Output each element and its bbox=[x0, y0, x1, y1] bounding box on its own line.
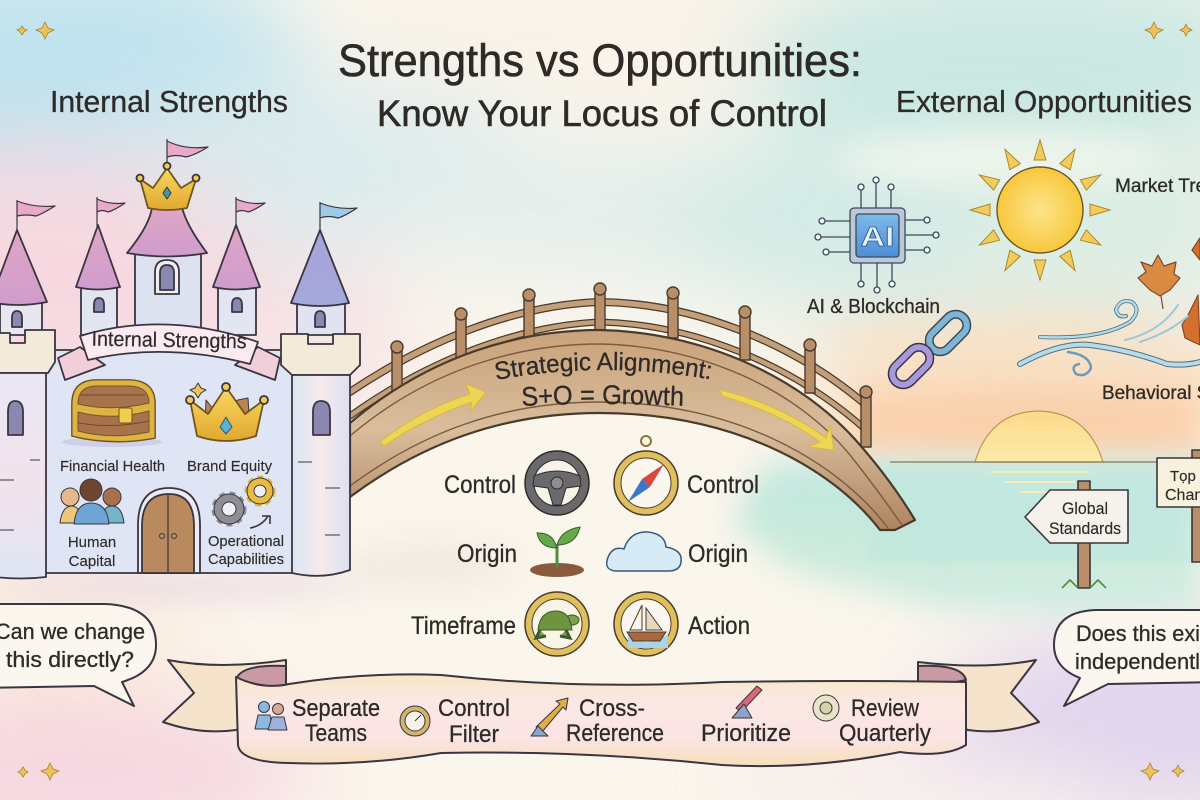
action labels: Filter bbox=[449, 721, 499, 748]
label: operational capabilities: Operational bbox=[208, 533, 284, 550]
flags bbox=[17, 139, 357, 232]
bridge label: S+O = Growth bbox=[522, 385, 683, 406]
ribbon label: Internal Strengths bbox=[91, 328, 247, 353]
action labels: Review bbox=[851, 695, 920, 722]
panel: castle bbox=[0, 139, 360, 578]
castle ribbon bbox=[58, 324, 280, 380]
panel: speech bubble right bbox=[1054, 610, 1200, 706]
panel: speech bubble left: this directly? bbox=[6, 647, 134, 672]
icon: AI chip: AI bbox=[860, 221, 894, 252]
icon: treasure chest bbox=[62, 380, 162, 447]
left tower bbox=[0, 230, 55, 578]
setting sun on horizon bbox=[890, 411, 1200, 492]
icon: autumn leaves bbox=[1138, 238, 1200, 345]
action labels: Prioritize bbox=[701, 720, 791, 747]
row 2: origin bbox=[457, 527, 748, 577]
bridge railing bbox=[350, 302, 866, 430]
label: human capital: Human bbox=[68, 534, 116, 551]
icon: gears bbox=[214, 478, 273, 528]
icon: human capital people bbox=[60, 479, 124, 524]
signpost: right clipped bbox=[1157, 450, 1200, 562]
row 3: timeframe and action bbox=[411, 592, 750, 656]
panel: bridge bbox=[350, 283, 915, 530]
bridge deck bbox=[350, 330, 915, 530]
icon: cross-reference arrow bbox=[531, 698, 568, 736]
action labels: Quarterly bbox=[839, 720, 931, 747]
signpost: global standards: Global bbox=[1062, 499, 1108, 518]
action labels bbox=[292, 695, 931, 748]
row 1: control bbox=[444, 436, 759, 515]
icon: control filter dial bbox=[400, 706, 430, 736]
title: Strengths vs Opportunities: bbox=[338, 35, 862, 86]
panel: speech bubble right: independentl bbox=[1075, 649, 1200, 674]
heading: external opportunities: External Opportunities bbox=[896, 84, 1192, 119]
action labels: Teams bbox=[305, 720, 367, 747]
icon: separate teams bbox=[255, 702, 287, 730]
center keep bbox=[127, 207, 207, 328]
side turrets bbox=[76, 225, 260, 335]
icon: AI chip bbox=[815, 177, 939, 293]
icon: chain link bbox=[888, 310, 971, 389]
label: human capital: Capital bbox=[69, 553, 115, 570]
signpost: global standards bbox=[1025, 481, 1128, 588]
signpost: right clipped: Tọp bbox=[1170, 468, 1196, 485]
icon: wind swirl bbox=[1020, 301, 1200, 375]
row 1: control: Control bbox=[687, 471, 759, 499]
bridge label: Strategic Alignment: bbox=[495, 352, 711, 380]
yellow arrows on deck bbox=[380, 384, 834, 450]
castle wall bbox=[40, 350, 295, 573]
icon: prioritize lever bbox=[732, 686, 762, 718]
icon: crown brand equity bbox=[186, 383, 268, 441]
icon: review quarterly dial bbox=[813, 695, 839, 721]
signpost: global standards: Standards bbox=[1049, 519, 1121, 538]
panel: speech bubble left bbox=[0, 604, 156, 706]
action labels: Control bbox=[438, 695, 510, 722]
title bbox=[338, 35, 862, 134]
title: Know Your Locus of Control bbox=[377, 93, 827, 134]
label: financial health: Financial Health bbox=[60, 458, 165, 475]
icon: sun bbox=[970, 140, 1110, 280]
gold crown on keep bbox=[136, 162, 200, 210]
action labels: Reference bbox=[566, 720, 664, 747]
heading: internal strengths: Internal Strengths bbox=[50, 84, 288, 119]
label: capabilities: Capabilities bbox=[208, 551, 284, 568]
right tower bbox=[281, 230, 360, 576]
action labels: Cross- bbox=[579, 695, 645, 722]
row 2: origin: Origin bbox=[688, 540, 748, 568]
action labels: Separate bbox=[292, 695, 380, 722]
row 3: timeframe and action: Action bbox=[688, 612, 750, 640]
row 3: timeframe and action: Timeframe bbox=[411, 612, 516, 640]
panel: action ribbon banner bbox=[163, 660, 1039, 766]
label: AI and blockchain: AI & Blockchain bbox=[807, 296, 940, 318]
panel: speech bubble right: Does this exi bbox=[1076, 621, 1200, 646]
panel: comparison icons bbox=[411, 436, 759, 656]
row 2: origin: Origin bbox=[457, 540, 517, 568]
bridge label bbox=[495, 352, 711, 406]
row 1: control: Control bbox=[444, 471, 516, 499]
label: brand equity: Brand Equity bbox=[187, 458, 272, 475]
door bbox=[138, 488, 200, 573]
